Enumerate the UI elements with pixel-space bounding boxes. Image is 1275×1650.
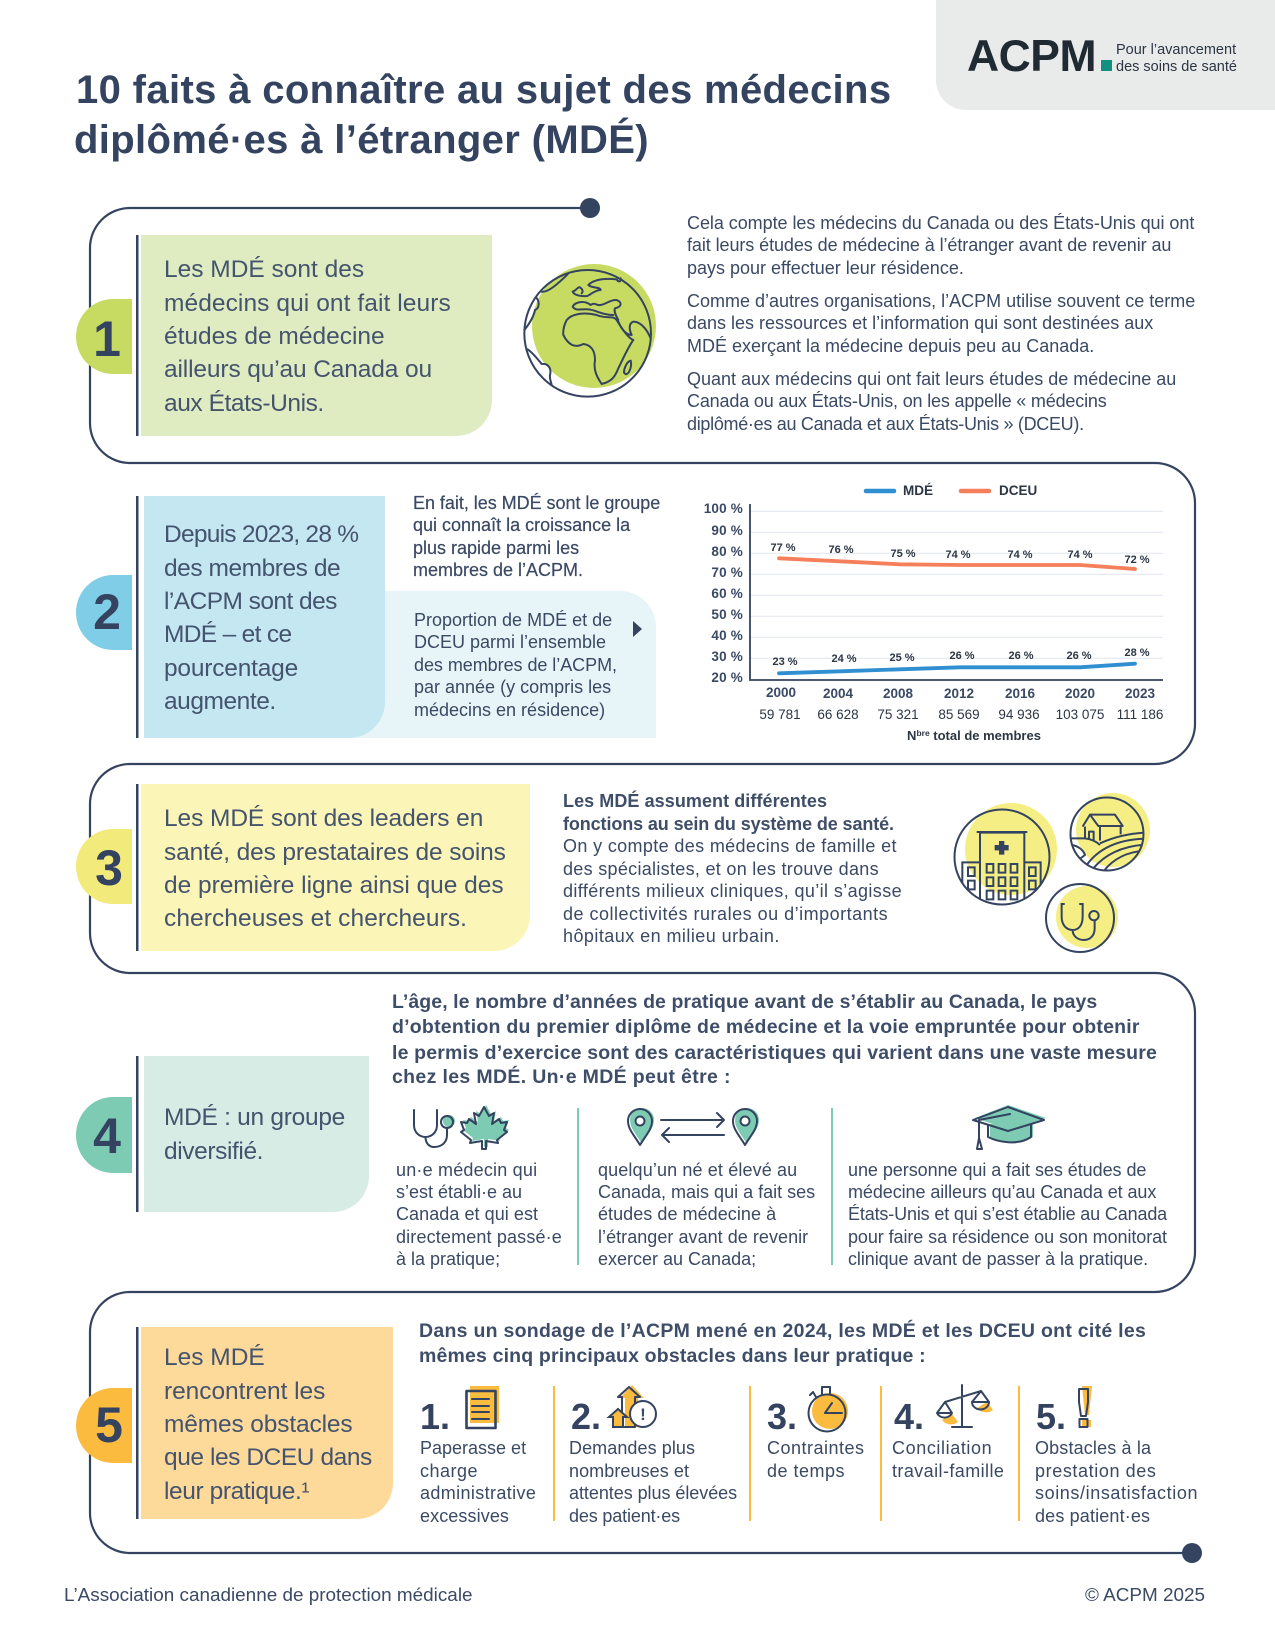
- fact 4 intro text: [392, 991, 1157, 1088]
- total members row: [759, 707, 1163, 722]
- chart legend: MDÉ: [903, 483, 933, 498]
- arrow pointing to chart: [633, 621, 642, 637]
- MDE data labels: 26 %: [1066, 650, 1092, 662]
- fact 2 supporting text: qui connaît la croissance la: [413, 515, 631, 535]
- obstacle 1: Paperasse et: [420, 1438, 526, 1458]
- chart legend: [866, 483, 1037, 498]
- obstacle 1: excessives: [420, 1506, 509, 1526]
- fact 1 explanation text: fait leurs études de médecine à l’étranger avant de revenir au: [687, 235, 1171, 255]
- fact 5 intro text: mêmes cinq principaux obstacles dans leur pratique :: [419, 1345, 926, 1367]
- fact 3 supporting text: fonctions au sein du système de santé.: [563, 814, 894, 834]
- x axis years: 2008: [883, 686, 914, 701]
- MDE data labels: 25 %: [889, 652, 915, 664]
- obstacle 3: Contraintes: [767, 1438, 865, 1458]
- fact 1 explanation text: pays pour effectuer leur résidence.: [687, 258, 964, 278]
- logo square: [1101, 60, 1112, 71]
- panel: fact 5: [76, 1319, 1198, 1526]
- logo tagline: Pour l’avancement: [1116, 42, 1236, 58]
- x axis years: 2004: [823, 686, 854, 701]
- fact 1 statement box: aux États-Unis.: [164, 390, 324, 417]
- obstacle 5: Obstacles à la: [1035, 1438, 1152, 1458]
- fact 5 intro text: [419, 1319, 1146, 1367]
- MDE data labels: 26 %: [949, 650, 975, 662]
- fact 2 statement box: augmente.: [164, 688, 276, 715]
- profile 2 text: l’étranger avant de revenir: [598, 1227, 808, 1247]
- DCEU data labels: 72 %: [1124, 554, 1150, 566]
- x axis years: 2023: [1125, 686, 1156, 701]
- obstacle 5: des patient·es: [1035, 1506, 1150, 1526]
- fact 3 statement box: de première ligne ainsi que des: [164, 872, 504, 899]
- fact 1 statement box: Les MDÉ sont des: [164, 256, 364, 283]
- y axis labels: 70 %: [711, 565, 743, 580]
- profile 2 text: études de médecine à: [598, 1204, 777, 1224]
- fact 3 statement box: chercheuses et chercheurs.: [164, 905, 467, 932]
- fact 1 explanation text: diplômé·es au Canada et aux États-Unis » (DCEU).: [687, 414, 1084, 434]
- MDE data labels: 24 %: [831, 653, 857, 665]
- fact 2 statement box: [136, 496, 385, 738]
- profile 3: studied abroad, residency in Canada: [848, 1105, 1168, 1269]
- fact 2 statement box: MDÉ – et ce: [164, 621, 291, 648]
- y axis labels: 20 %: [711, 670, 743, 685]
- fact 5 statement box: que les DCEU dans: [164, 1444, 372, 1471]
- fact 2 statement box: pourcentage: [164, 655, 298, 682]
- icon: hospital: [954, 803, 1057, 907]
- profile 1: physician established in Canada: [396, 1105, 562, 1269]
- logo tagline: des soins de santé: [1116, 59, 1237, 75]
- logo wordmark: ACPM: [967, 32, 1096, 81]
- total members row: 85 569: [938, 707, 980, 722]
- x axis years: 2020: [1065, 686, 1095, 701]
- number badge 2: 2: [93, 584, 121, 640]
- icon: rising demands: [609, 1385, 656, 1427]
- total members row: 94 936: [998, 707, 1040, 722]
- y axis labels: 60 %: [711, 586, 743, 601]
- fact 1 statement box: médecins qui ont fait leurs: [164, 290, 451, 317]
- y axis labels: 100 %: [704, 501, 743, 516]
- icon: stethoscope: [1046, 884, 1118, 952]
- chart caption box: par année (y compris les: [414, 677, 611, 697]
- icon: exclamation mark: [1079, 1386, 1092, 1427]
- icon: paperwork: [466, 1386, 499, 1428]
- fact 2 supporting text: [413, 493, 660, 580]
- fact 3 supporting text: différents milieux cliniques, qu’il s’agisse: [563, 881, 902, 901]
- obstacle 2: [569, 1385, 737, 1526]
- fact 4 statement box: [136, 1056, 369, 1212]
- fact 3 supporting text: On y compte des médecins de famille et: [563, 836, 897, 856]
- fact 1 explanation text: Comme d’autres organisations, l’ACPM utilise souvent ce terme: [687, 291, 1195, 311]
- obstacle 2: Demandes plus: [569, 1438, 695, 1458]
- DCEU data labels: [770, 542, 1150, 566]
- obstacle 4: Conciliation: [892, 1438, 992, 1458]
- line chart: share of MDE and DCEU: [704, 483, 1163, 743]
- profile 3 text: [848, 1160, 1168, 1269]
- serpentine frame connecting the five panels: [90, 198, 1202, 1563]
- profile 2 text: Canada, mais qui a fait ses: [598, 1182, 815, 1202]
- fact 4 intro text: L’âge, le nombre d’années de pratique avant de s’établir au Canada, le pays: [392, 991, 1097, 1013]
- DCEU data labels: 75 %: [890, 548, 916, 560]
- profile 1 text: Canada et qui est: [396, 1204, 538, 1224]
- obstacle 1: [420, 1386, 536, 1526]
- chart caption box: médecins en résidence): [414, 700, 605, 720]
- number badge 4: [76, 1097, 132, 1173]
- number badge 4: 4: [93, 1108, 121, 1164]
- obstacle 1: administrative: [420, 1483, 536, 1503]
- fact 1 statement box: études de médecine: [164, 323, 385, 350]
- MDE data labels: 26 %: [1008, 650, 1034, 662]
- DCEU data labels: 74 %: [1007, 549, 1033, 561]
- DCEU line: [779, 558, 1135, 569]
- fact 2 statement box: l’ACPM sont des: [164, 588, 337, 615]
- profile 1 text: à la pratique;: [396, 1249, 500, 1269]
- profile 3 text: États-Unis et qui s’est établie au Canada: [848, 1204, 1168, 1224]
- fact 1 explanation text: dans les ressources et l’information qui sont destinées aux: [687, 313, 1153, 333]
- obstacle 4: [892, 1385, 1004, 1481]
- profile 3 text: médecine ailleurs qu’au Canada et aux: [848, 1182, 1156, 1202]
- obstacle 5: soins/insatisfaction: [1035, 1483, 1198, 1503]
- fact 1 explanation text: Canada ou aux États-Unis, on les appelle « médecins: [687, 391, 1107, 411]
- fact 3 supporting text: de collectivités rurales ou d’importants: [563, 904, 888, 924]
- DCEU data labels: 74 %: [1067, 549, 1093, 561]
- number badge 1: [76, 299, 132, 374]
- fact 2 supporting text: plus rapide parmi les: [413, 538, 579, 558]
- total members row: 59 781: [759, 707, 801, 722]
- fact 1 explanation text: Quant aux médecins qui ont fait leurs études de médecine au: [687, 369, 1176, 389]
- obstacle 1: charge: [420, 1461, 478, 1481]
- header logo panel: [936, 0, 1275, 110]
- icon: rising demands: !: [640, 1405, 646, 1424]
- number badge 5: 5: [95, 1397, 123, 1453]
- icon: stethoscope and maple leaf: [414, 1105, 509, 1149]
- profile 1 text: directement passé·e: [396, 1227, 562, 1247]
- chart caption box: DCEU parmi l’ensemble: [414, 632, 606, 652]
- y axis labels: 30 %: [711, 649, 743, 664]
- number badge 5: [76, 1388, 132, 1463]
- footer: organization name: L’Association canadienne de protection médicale: [64, 1585, 473, 1606]
- icon: two map pins with arrows: [628, 1108, 759, 1145]
- fact 5 statement box: leur pratique.¹: [164, 1478, 309, 1505]
- DCEU data labels: 77 %: [770, 542, 796, 554]
- profile 3 text: une personne qui a fait ses études de: [848, 1160, 1146, 1180]
- fact 3 supporting text: des spécialistes, et on les trouve dans: [563, 859, 879, 879]
- x axis years: 2000: [766, 685, 796, 700]
- title: diplômé·es à l’étranger (MDÉ): [74, 117, 649, 162]
- fact 2 statement box: des membres de: [164, 555, 340, 582]
- obstacle 4: travail-famille: [892, 1461, 1004, 1481]
- icon: graduation cap: [973, 1105, 1046, 1149]
- profile 1 text: [396, 1160, 562, 1269]
- profile 2 text: quelqu’un né et élevé au: [598, 1160, 797, 1180]
- icon: stopwatch: [808, 1387, 848, 1432]
- DCEU data labels: 74 %: [945, 549, 971, 561]
- title: [74, 68, 891, 162]
- fact 4 intro text: chez les MDÉ. Un·e MDÉ peut être :: [392, 1065, 731, 1088]
- fact 3 statement box: Les MDÉ sont des leaders en: [164, 805, 483, 832]
- chart caption box: des membres de l’ACPM,: [414, 655, 617, 675]
- fact 4 intro text: le permis d’exercice sont des caractéristiques qui varient dans une vaste mesure: [392, 1042, 1157, 1064]
- y axis labels: 50 %: [711, 607, 743, 622]
- fact 3 supporting text: [563, 790, 902, 946]
- MDE line: [779, 664, 1135, 673]
- icon: balance scale: [937, 1385, 993, 1427]
- chart caption box: Proportion de MDÉ et de: [414, 610, 612, 630]
- MDE data labels: [772, 647, 1150, 668]
- panel: fact 3: [76, 784, 1150, 952]
- profile 1 text: un·e médecin qui: [396, 1160, 537, 1180]
- fact 1 statement box: ailleurs qu’au Canada ou: [164, 356, 432, 383]
- obstacle 2: nombreuses et: [569, 1461, 689, 1481]
- fact 2 supporting text: En fait, les MDÉ sont le groupe: [413, 493, 660, 513]
- obstacle 1: 1.: [420, 1396, 450, 1437]
- fact 4 statement box: diversifié.: [164, 1138, 263, 1165]
- fact 3 supporting text: Les MDÉ assument différentes: [563, 790, 827, 811]
- icon: globe: [524, 264, 656, 397]
- icon: farm: [1070, 793, 1150, 872]
- obstacle 3: [767, 1387, 865, 1481]
- y axis labels: 40 %: [711, 628, 743, 643]
- fact 5 statement box: mêmes obstacles: [164, 1411, 353, 1438]
- obstacle 2: attentes plus élevées: [569, 1483, 737, 1503]
- profile 2 text: exercer au Canada;: [598, 1249, 756, 1269]
- obstacle 2: des patient·es: [569, 1506, 680, 1526]
- fact 2 supporting text: membres de l’ACPM.: [413, 560, 583, 580]
- total members row: 103 075: [1056, 707, 1104, 722]
- x axis years: [766, 685, 1156, 701]
- y axis labels: 80 %: [711, 544, 743, 559]
- profile 1 text: s’est établi·e au: [396, 1182, 522, 1202]
- obstacle 5: prestation des: [1035, 1461, 1156, 1481]
- obstacle 4: 4.: [894, 1396, 924, 1437]
- fact 5 statement box: [136, 1327, 393, 1519]
- fact 5 statement box: rencontrent les: [164, 1378, 325, 1405]
- number badge 1: 1: [93, 311, 121, 367]
- fact 4 intro text: d’obtention du premier diplôme de médecine et la voie empruntée pour obtenir: [392, 1016, 1140, 1038]
- total members row: 66 628: [817, 707, 859, 722]
- obstacle 3: 3.: [767, 1396, 797, 1437]
- fact 2 statement box: Depuis 2023, 28 %: [164, 521, 358, 548]
- panel: fact 1: [76, 213, 1195, 436]
- y axis labels: 90 %: [711, 523, 743, 538]
- x axis years: 2016: [1005, 686, 1036, 701]
- profile 3 text: clinique avant de passer à la pratique.: [848, 1249, 1148, 1269]
- panel: fact 4: [76, 991, 1168, 1269]
- total members row: 111 186: [1117, 707, 1163, 722]
- fact 1 explanation text: MDÉ exerçant la médecine depuis peu au Canada.: [687, 336, 1094, 356]
- x axis title: bre: [916, 728, 930, 738]
- chart caption box: [350, 591, 656, 738]
- profile 2: born in Canada, studied abroad: [598, 1108, 815, 1269]
- x axis title: N: [907, 728, 916, 743]
- DCEU data labels: 76 %: [828, 544, 854, 556]
- total members row: 75 321: [877, 707, 919, 722]
- obstacle 2: 2.: [571, 1396, 601, 1437]
- obstacle 5: 5.: [1036, 1396, 1066, 1437]
- fact 1 explanation text: Cela compte les médecins du Canada ou des États-Unis qui ont: [687, 213, 1194, 233]
- number badge 2: [76, 575, 132, 650]
- fact 4 statement box: MDÉ : un groupe: [164, 1104, 345, 1131]
- x axis title: total de membres: [930, 728, 1041, 743]
- obstacle 5: [1035, 1386, 1198, 1526]
- number badge 3: 3: [95, 840, 123, 896]
- fact 5 statement box: Les MDÉ: [164, 1344, 265, 1371]
- MDE data labels: 23 %: [772, 656, 798, 668]
- x axis years: 2012: [944, 686, 974, 701]
- panel: fact 2: [76, 483, 1163, 743]
- fact 1 statement box: [136, 235, 492, 436]
- fact 3 supporting text: hôpitaux en milieu urbain.: [563, 926, 780, 946]
- fact 3 statement box: [136, 784, 530, 951]
- profile 2 text: [598, 1160, 815, 1269]
- chart legend: DCEU: [999, 483, 1037, 498]
- footer: copyright: © ACPM 2025: [1085, 1585, 1205, 1606]
- obstacle 3: de temps: [767, 1461, 845, 1481]
- logo tagline: [1116, 42, 1237, 75]
- MDE data labels: 28 %: [1124, 647, 1150, 659]
- title: 10 faits à connaître au sujet des médecins: [76, 68, 891, 112]
- fact 3 statement box: santé, des prestataires de soins: [164, 839, 506, 866]
- y axis labels: [704, 501, 743, 685]
- fact 1 explanation text: [687, 213, 1195, 434]
- fact 5 intro text: Dans un sondage de l’ACPM mené en 2024, les MDÉ et les DCEU ont cité les: [419, 1319, 1146, 1342]
- number badge 3: [76, 829, 132, 904]
- profile 3 text: pour faire sa résidence ou son monitorat: [848, 1227, 1167, 1247]
